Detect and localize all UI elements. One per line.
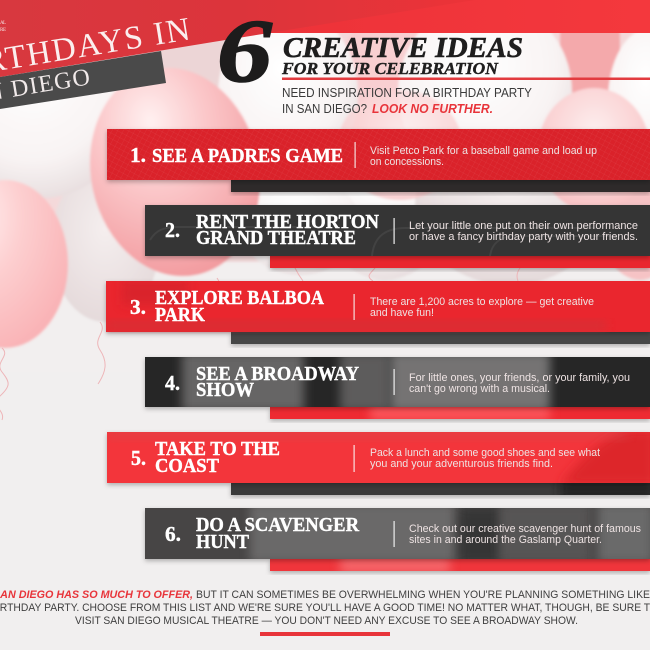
panel: idea 1: on concessions. [370,156,444,168]
ribbon: dark [0,51,166,109]
closing text [0,589,650,627]
panel: idea 2: GRAND THEATRE [196,227,356,249]
idea title: 4. [165,371,180,395]
main bar [145,508,650,559]
idea description: Visit Petco Park for a baseball game and load up [370,145,597,157]
panel: idea 1 [107,129,650,192]
closing text: VISIT SAN DIEGO MUSICAL THEATRE — YOU DON'T NEED ANY EXCUSE TO SEE A BROADWAY SHOW. [75,615,578,627]
panel: idea 4: SHOW [196,379,254,401]
heading rule [282,78,650,80]
panel: idea 5: you and your adventurous friends find. [370,458,553,470]
panel: idea 6 [145,503,650,574]
panel: idea 1: SEE A PADRES GAME [152,145,343,167]
panel: idea 5: TAKE TO THE [155,438,280,460]
idea description: There are 1,200 acres to explore — get creative [370,296,594,308]
panel: idea 3: and have fun! [370,307,434,319]
panel: idea 5: COAST [155,455,220,477]
small logo text: RE [0,28,6,33]
closing rule [260,632,390,636]
idea title: 5. [131,446,146,470]
balloon strings [0,268,520,420]
balloons background [0,0,650,372]
panel: idea 5 [107,430,650,498]
idea description: Let your little one put on their own performance [409,220,638,232]
main bar [106,281,650,332]
under bar [270,256,650,268]
panel: idea 4: SEE A BROADWAY [196,363,360,385]
heading line 1: CREATIVE IDEAS [283,33,523,64]
main bar [145,357,650,407]
under bar [231,332,650,344]
panel: idea 2: or have a fancy birthday party with your friends. [409,231,638,243]
panel: idea 3 [106,281,650,344]
idea title: 2. [165,218,180,242]
idea title: 6. [165,522,181,546]
main bar [107,129,650,180]
intro text: LOOK NO FURTHER. [372,101,493,116]
main bar [145,205,650,256]
idea title: 3. [130,295,146,319]
intro text: IN SAN DIEGO? [282,101,367,116]
title ribbon [0,0,475,112]
idea title: 1. [130,143,146,167]
heading line 2: FOR YOUR CELEBRATION [281,59,499,78]
small logo text [0,21,6,33]
panel: idea 2: RENT THE HORTON [196,211,380,233]
panel: idea 2 [145,205,650,268]
top red band [0,0,650,33]
main bar [107,432,650,483]
intro text [282,85,532,116]
panel: idea 4 [145,352,650,421]
panel: idea 6: sites in and around the Gaslamp Quarter. [409,534,602,546]
under bar [270,407,650,419]
idea description: For little ones, your friends, or your family, you [409,372,630,384]
under bar [231,180,650,192]
under bar [231,483,650,495]
panel: idea 3: PARK [155,304,205,326]
big number 6: 6 [217,2,272,101]
intro text: NEED INSPIRATION FOR A BIRTHDAY PARTY [282,85,532,100]
idea description: Pack a lunch and some good shoes and see what [370,447,600,459]
heading [217,2,650,116]
panel: idea 6: DO A SCAVENGER [196,514,360,536]
small logo text: AL [0,21,6,26]
panel: idea 3: EXPLORE BALBOA [155,287,324,309]
under bar [270,559,650,571]
panel: idea 6: HUNT [196,531,250,553]
ribbon: red [0,0,475,77]
idea description: Check out our creative scavenger hunt of famous [409,523,641,535]
panel: idea 4: can't go wrong with a musical. [409,383,550,395]
